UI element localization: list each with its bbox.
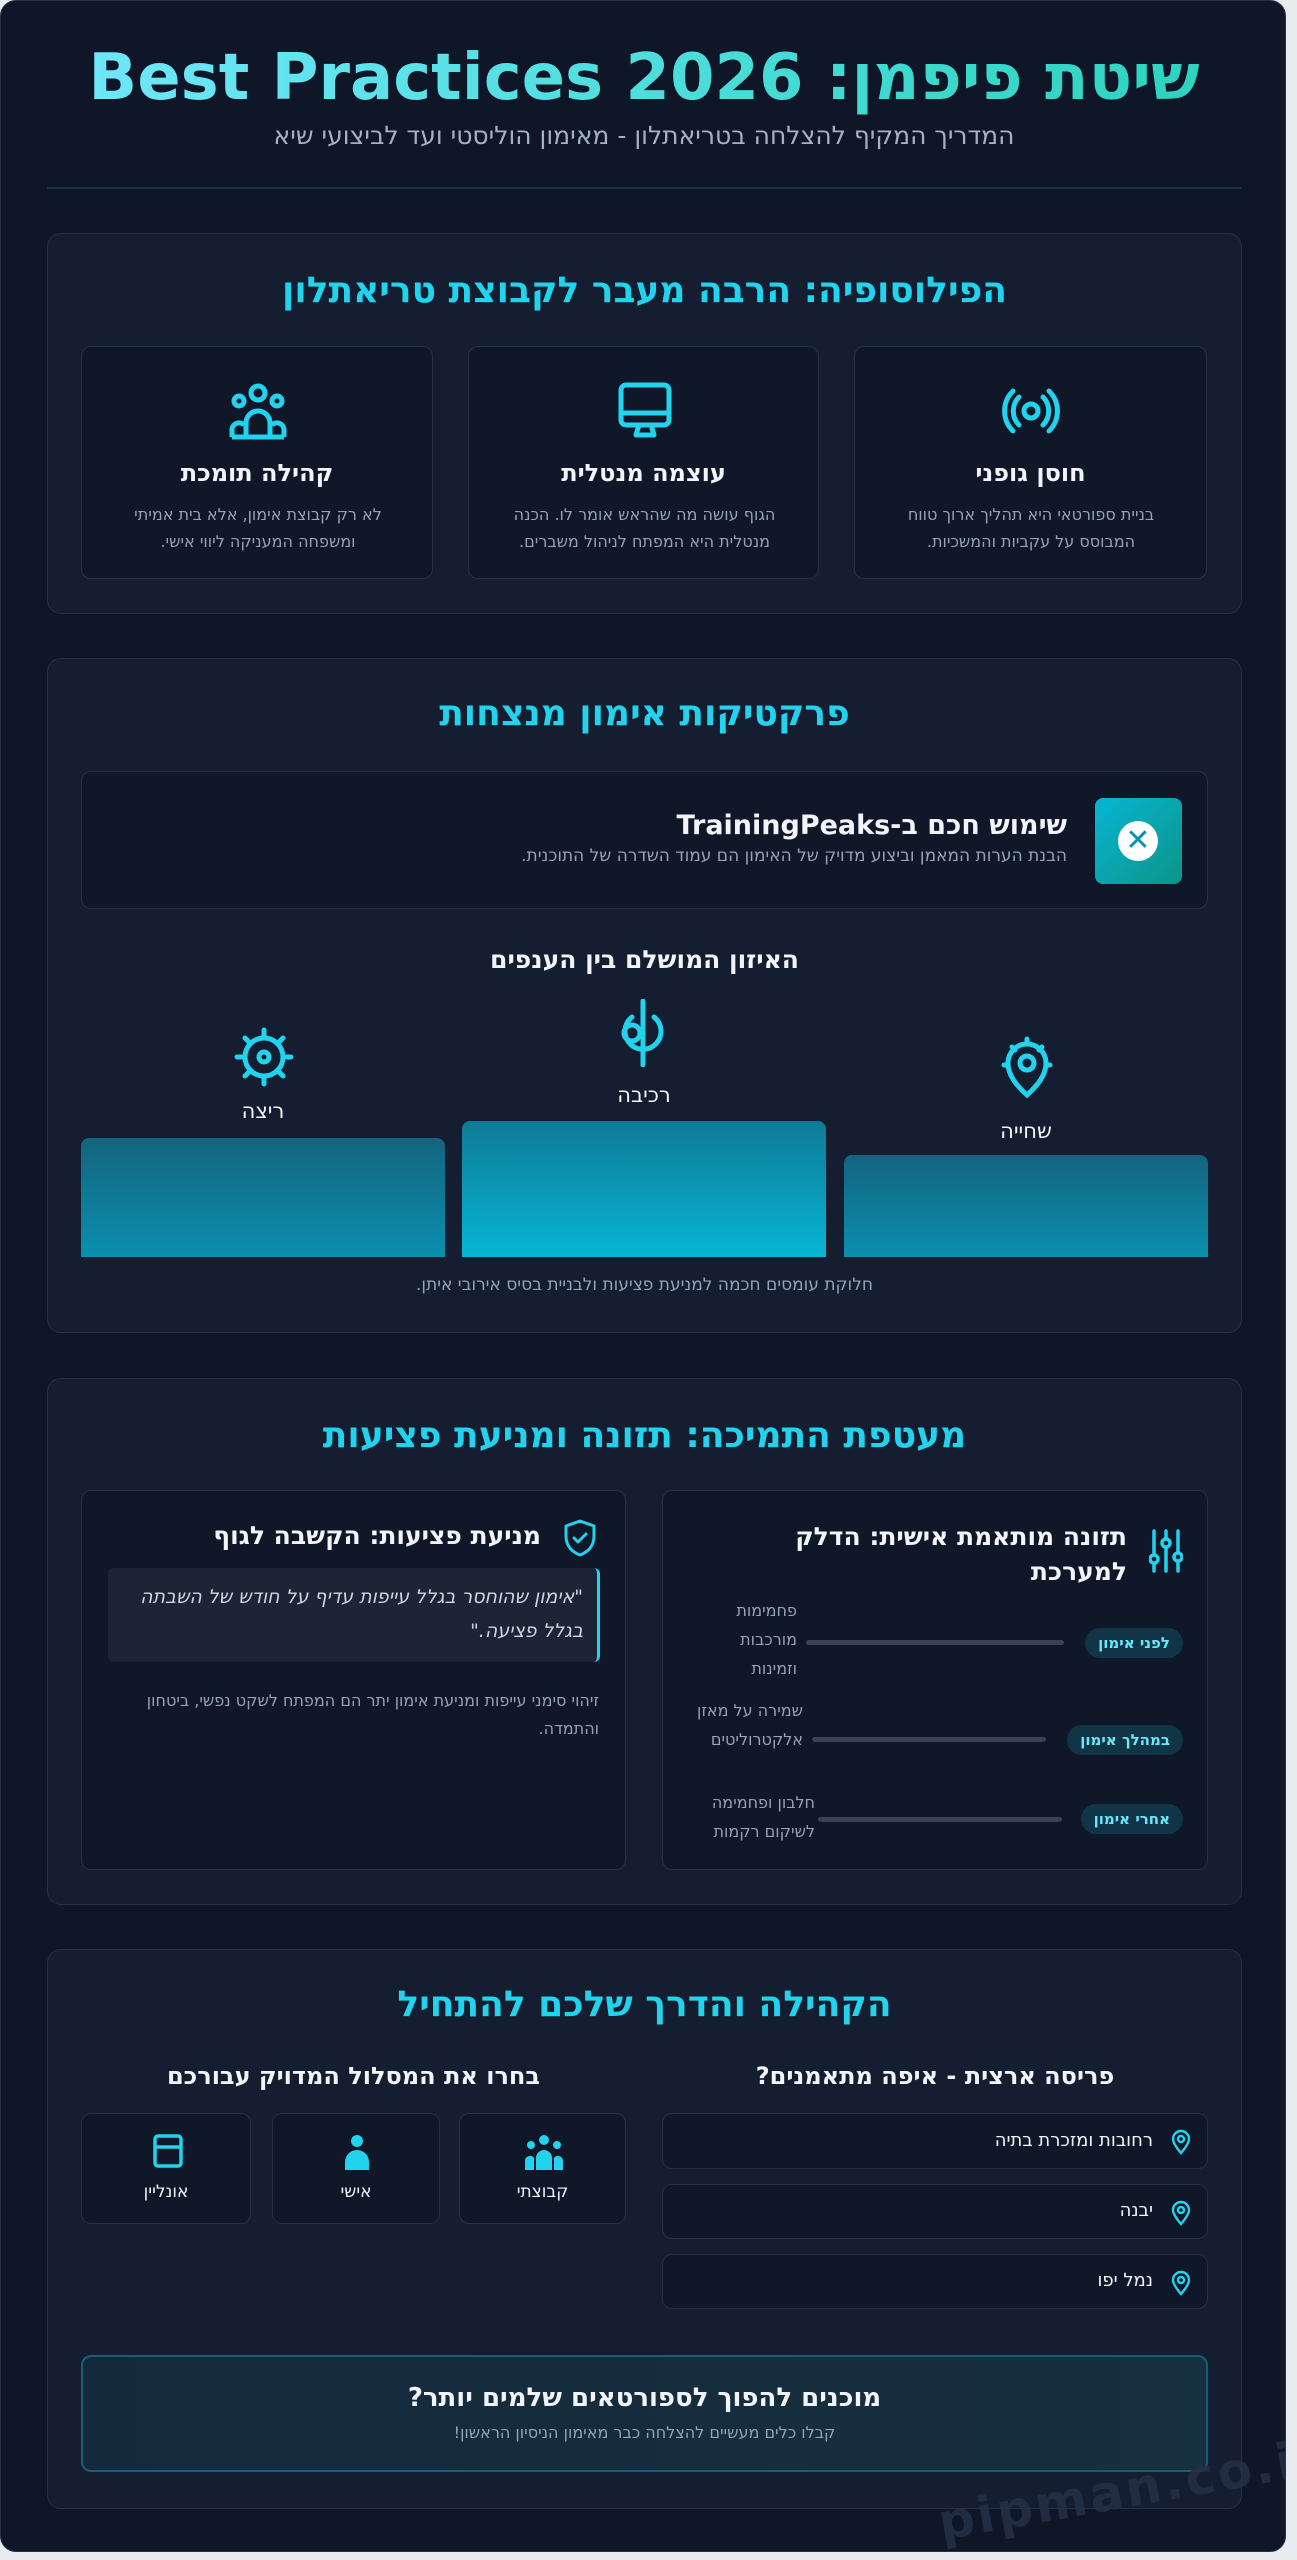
card: mental strength: הגוף עושה מה שהראש אומר לו. הכנה מנטלית היא המפתח לניהול משברים. [514, 505, 775, 551]
icon: group [230, 384, 286, 440]
row: after training [712, 1793, 1183, 1841]
bar: swim [844, 1036, 1208, 1257]
CTA: קבלו כלים מעשיים להצלחה כבר מאימון הניסיון הראשון! [454, 2423, 835, 2442]
panel: training practices [47, 658, 1242, 1333]
location: Yavne [662, 2184, 1208, 2239]
option: personal [272, 2113, 440, 2224]
callout: TrainingPeaks: הבנת הערות המאמן וביצוע מדויק של האימון הם עמוד השדרה של התוכנית. [521, 846, 1067, 866]
title: שיטת פיפמן: Best Practices 2026 [88, 41, 1200, 115]
icon: TrainingPeaks [1095, 798, 1182, 884]
bar: swim: שחייה [1000, 1119, 1052, 1143]
card: mental strength: עוצמה מנטלית [561, 459, 726, 487]
row: before training: לפני אימון [1098, 1634, 1170, 1652]
subtitle: המדריך המקיף להצלחה בטריאתלון - מאימון הוליסטי ועד לביצועי שיא [274, 121, 1014, 150]
row: before training [736, 1601, 1183, 1678]
subheading: locations: פריסה ארצית - איפה מתאמנים? [756, 2062, 1114, 2090]
row: during training [697, 1701, 1183, 1755]
option: personal: אישי [340, 2182, 372, 2202]
row: after training: אחרי אימון [1094, 1810, 1170, 1828]
heading: philosophy: הפילוסופיה: הרבה מעבר לקבוצת טריאתלון [282, 270, 1007, 311]
option: online [81, 2113, 251, 2224]
bar chart: disciplines [81, 999, 1208, 1257]
CTA [81, 2355, 1208, 2472]
heading: community: הקהילה והדרך שלכם להתחיל [397, 1984, 892, 2025]
panel: support [47, 1378, 1242, 1905]
bar: run: ריצה [242, 1099, 284, 1123]
row: before training: פחמימות מורכבות וזמינות [736, 1601, 797, 1678]
location: Jaffa port: נמל יפו [1097, 2270, 1153, 2291]
text: injury description: זיהוי סימני עייפות ומניעת אימון יתר הם המפתח לשקט נפשי, ביטחון והתמדה. [147, 1691, 599, 1738]
heading: perfect balance: האיזון המושלם בין הענפים [490, 945, 799, 974]
heading: training practices: פרקטיקות אימון מנצחות [439, 693, 850, 734]
heading: support: מעטפת התמיכה: תזונה ומניעת פציעות [323, 1415, 966, 1456]
location: Rehovot [662, 2113, 1208, 2169]
subheading: tracks: בחרו את המסלול המדויק עבורכם [167, 2062, 540, 2090]
CTA: מוכנים להפוך לספורטאים שלמים יותר? [408, 2383, 881, 2413]
caption: bar chart: חלוקת עומסים חכמה למניעת פציעות ולבניית בסיס אירובי איתן. [416, 1275, 873, 1295]
location: Rehovot: רחובות ומזכרת בתיה [995, 2130, 1153, 2151]
panel: philosophy [47, 233, 1242, 614]
card: physical resilience: בניית ספורטאי היא תהליך ארוך טווח המבוסס על עקביות והמשכיות. [908, 505, 1154, 551]
icon: shield [564, 1520, 596, 1556]
callout: TrainingPeaks [81, 771, 1208, 909]
heading: nutrition: תזונה מותאמת אישית: הדלק למערכת [795, 1522, 1127, 1586]
card: nutrition [662, 1490, 1208, 1870]
location: Jaffa port [662, 2254, 1208, 2309]
callout: TrainingPeaks: שימוש חכם ב-TrainingPeaks [677, 810, 1067, 841]
icon: sliders [1149, 1529, 1183, 1573]
heading: injury prevention: מניעת פציעות: הקשבה לגוף [213, 1521, 541, 1550]
row: during training: שמירה על מאזן אלקטרוליטים [697, 1701, 803, 1749]
panel: community [47, 1949, 1242, 2509]
quote: "אימון שהוחסר בגלל עייפות עדיף על חודש של השבתה בגלל פציעה." [140, 1586, 583, 1642]
icon: monitor [618, 382, 672, 438]
card: supportive community [81, 346, 433, 579]
card: supportive community: קהילה תומכת [181, 459, 333, 487]
card: injury prevention [81, 1490, 626, 1870]
row: after training: חלבון ופחמימה לשיקום רקמות [712, 1793, 815, 1841]
card: physical resilience: חוסן גופני [975, 459, 1086, 487]
card: supportive community: לא רק קבוצת אימון, אלא בית אמיתי ומשפחה המעניקה ליווי אישי. [134, 505, 382, 551]
row: during training: במהלך אימון [1080, 1731, 1170, 1749]
option: group: קבוצתי [517, 2182, 568, 2202]
bar: run [81, 1028, 445, 1257]
bar: bike: רכיבה [617, 1083, 671, 1107]
icon: broadcast [1002, 388, 1060, 434]
bar: bike [462, 999, 826, 1257]
card: physical resilience [854, 346, 1207, 579]
icon: TrainingPeaks: ✕ [1125, 823, 1151, 858]
option: group [459, 2113, 626, 2224]
location: Yavne: יבנה [1120, 2200, 1153, 2221]
option: online: אונליין [144, 2182, 188, 2202]
quote [108, 1568, 600, 1662]
card: mental strength [468, 346, 819, 579]
